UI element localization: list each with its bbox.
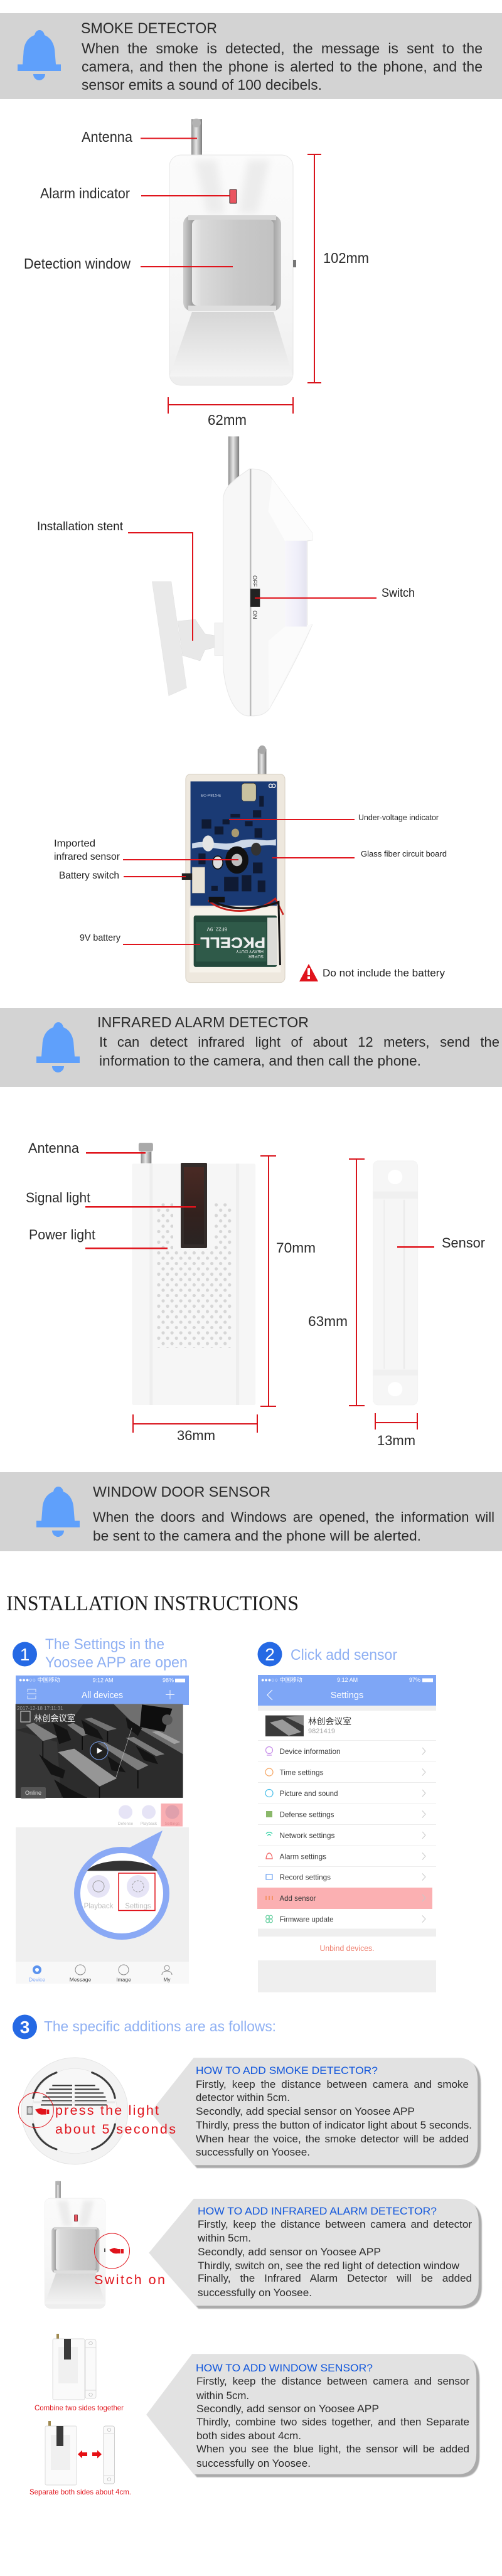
tab bar: Image: [116, 1977, 131, 1983]
callout text: When hear the voice, the smoke detector will be added: [196, 2133, 469, 2145]
panel: infrared alarm detector banner: [0, 1008, 502, 1087]
settings header: ●●●○○ 中国移动: [261, 1676, 302, 1683]
panel: infrared how-to callout: [149, 2199, 482, 2309]
action buttons: Settings: [165, 1822, 180, 1826]
settings list: Alarm settings: [280, 1852, 326, 1861]
callout text: detector within 5cm.: [196, 2092, 290, 2103]
app header: ●●●○○ 中国移动: [19, 1676, 60, 1683]
step 2 heading: [257, 1642, 397, 1667]
settings list: Picture and sound: [280, 1789, 338, 1798]
text block: window door description: [93, 1509, 494, 1544]
device summary row: 林创会议室: [308, 1716, 351, 1726]
heading: smoke detector: SMOKE DETECTOR: [81, 20, 217, 37]
devices combined: [53, 2334, 96, 2400]
step 1 heading: The Settings in the: [45, 1636, 164, 1653]
magnifier callout: [77, 1830, 166, 1937]
callout text: Thirdly, switch on, see the red light of detection window: [198, 2260, 460, 2272]
settings header: Settings: [331, 1691, 363, 1701]
tab bar: Message: [70, 1977, 92, 1983]
callout: alarm indicator: Alarm indicator: [40, 185, 130, 201]
device summary row: [265, 1716, 351, 1736]
battery print: SUPER: [248, 954, 264, 958]
callout heading: HOW TO ADD WINDOW SENSOR?: [196, 2362, 373, 2374]
magnifier callout: Playback: [84, 1903, 114, 1910]
callout text: [196, 2078, 472, 2158]
dimension: 102mm: [307, 154, 369, 383]
callout heading: HOW TO ADD INFRARED ALARM DETECTOR?: [198, 2205, 437, 2217]
tab bar: Device: [29, 1977, 45, 1983]
text block: infrared description: It can detect infrared light of about 12 meters, send the: [99, 1034, 499, 1050]
callout shape: [149, 2199, 482, 2309]
side button: [293, 260, 296, 267]
step 1 heading: [13, 1636, 188, 1671]
settings list: [258, 1741, 436, 1929]
callout text: Thirdly, press the button of indicator light about 5 seconds.: [196, 2119, 472, 2131]
icon: bell: [36, 1022, 80, 1072]
callout: 9V battery: 9V battery: [80, 933, 120, 943]
text block: smoke detector description: When the smoke is detected, the message is sent to the: [82, 40, 483, 56]
heading: window door sensor: WINDOW DOOR SENSOR: [93, 1483, 270, 1500]
battery print: PKCELL: [200, 934, 265, 951]
settings header: [258, 1675, 436, 1706]
instruction text: Switch on: [94, 2272, 165, 2287]
callout: sensor: [397, 1235, 485, 1251]
callout: imported infrared sensor: Imported: [54, 838, 95, 849]
camera photo: [16, 1704, 183, 1798]
caption: separate: Separate both sides about 4cm.: [29, 2488, 131, 2496]
callout text: Firstly, keep the distance between camera and detector: [198, 2218, 472, 2230]
action buttons: Playback: [141, 1822, 158, 1826]
callout: power light: Power light: [29, 1227, 95, 1243]
dimension: 70mm: [260, 1156, 316, 1406]
dimension: 102mm: 102mm: [323, 250, 369, 266]
marker: switch circle: [94, 2233, 129, 2269]
callout heading: HOW TO ADD SMOKE DETECTOR?: [196, 2065, 378, 2076]
callout: antenna: Antenna: [82, 129, 132, 145]
dimension: 62mm: [168, 397, 293, 428]
callout text: Secondly, add sensor on Yoosee APP: [198, 2246, 381, 2258]
highlight: add sensor: [257, 1888, 432, 1909]
text block: smoke detector description: camera, and then the phone is alerted to the phone, and the: [82, 58, 483, 75]
dimension: 36mm: 36mm: [177, 1428, 215, 1443]
device: side view: [152, 436, 312, 716]
dimension: 63mm: [308, 1159, 365, 1406]
callout: detection window: Detection window: [24, 255, 131, 272]
settings list: Firmware update: [280, 1915, 334, 1924]
panel: window sensor how-to callout: [146, 2354, 479, 2477]
dimension: 13mm: 13mm: [377, 1433, 415, 1448]
text block: window door description: be sent to the camera and the phone will be alerted.: [93, 1528, 421, 1544]
callout: installation stent: Installation stent: [37, 520, 124, 533]
callout: antenna: Antenna: [28, 1140, 80, 1156]
callout shape: [146, 2354, 479, 2477]
callout text: Firstly, keep the distance between camera and sensor: [196, 2375, 469, 2387]
callout text: Firstly, keep the distance between camera and smoke: [196, 2078, 469, 2090]
device: opened housing with circuit board and battery: EC-P815-E: [201, 793, 221, 798]
icon: bell: [18, 30, 61, 80]
text block: infrared description: [99, 1034, 499, 1069]
device: smoke detector: [18, 2058, 128, 2164]
callout text: within 5cm.: [196, 2390, 249, 2402]
panel: smoke detector how-to callout: [151, 2058, 481, 2168]
settings list: Defense settings: [280, 1810, 334, 1819]
callout: signal light: Signal light: [26, 1190, 90, 1205]
panel: side view with stent and switch: ON: [252, 611, 258, 619]
callout shape: [151, 2058, 481, 2168]
step 3 heading: [13, 2014, 276, 2039]
step 3 heading: 3: [20, 2018, 29, 2037]
panel: internal view: [54, 746, 447, 983]
step 3 heading: The specific additions are as follows:: [44, 2018, 276, 2034]
dimension: 62mm: 62mm: [208, 412, 247, 428]
instruction text: press the light: [55, 2103, 159, 2118]
unbind devices: Unbind devices.: [320, 1943, 374, 1953]
device: front view: [169, 119, 293, 385]
dimension: 36mm: [133, 1414, 257, 1443]
step 2 heading: 2: [265, 1645, 275, 1664]
text block: smoke detector description: [82, 40, 483, 93]
callout text: within 5cm.: [197, 2232, 251, 2244]
arrows: [78, 2450, 102, 2459]
warning: battery not included: Do not include the battery: [323, 967, 446, 979]
step 2 heading: Click add sensor: [291, 1647, 397, 1664]
panel: window door sensor banner: [0, 1472, 502, 1551]
camera photo: Online: [25, 1790, 41, 1796]
callout text: successfully on Yoosee.: [196, 2146, 310, 2158]
switch labels: OFF: [252, 575, 258, 587]
settings header: 97%: [409, 1677, 420, 1683]
device: opened housing with circuit board and battery: [182, 746, 285, 983]
panel: app screen settings: [257, 1675, 436, 1992]
heading: infrared alarm detector: INFRARED ALARM DETECTOR: [97, 1014, 309, 1030]
devices separated: [45, 2421, 114, 2485]
callout: battery switch: Battery switch: [59, 870, 119, 881]
icon: bell: [36, 1487, 80, 1537]
warning: battery not included: [299, 964, 446, 981]
panel: smoke detector how-to illustration: [18, 2058, 176, 2164]
panel: side view with stent and switch: [37, 436, 415, 716]
panel: app screen all devices: [16, 1675, 189, 1984]
callout: imported infrared sensor: [54, 838, 238, 862]
battery print: [200, 926, 265, 958]
settings list: Record settings: [280, 1873, 331, 1881]
device: infrared detector: [45, 2181, 105, 2308]
text block: smoke detector description: sensor emits a sound of 100 decibels.: [82, 77, 322, 93]
highlight: settings button: [161, 1804, 183, 1826]
magnifier callout: Settings: [125, 1903, 151, 1910]
tab bar: [16, 1962, 189, 1984]
device summary row: 9821419: [308, 1728, 335, 1735]
step 1 heading: 1: [20, 1645, 29, 1664]
callout: imported infrared sensor: infrared sensor: [54, 852, 120, 862]
app header: All devices: [82, 1691, 123, 1701]
panel: window sensor how-to illustration: [29, 2334, 131, 2496]
callout text: successfully on Yoosee.: [196, 2457, 311, 2469]
callout text: Thirdly, combine two sides together, and then Separate: [196, 2416, 469, 2428]
panel: window door sensor dimensions: [26, 1140, 485, 1448]
battery print: 6F22. 9V: [206, 926, 227, 932]
panel: infrared detector front view: [24, 119, 369, 428]
text block: window door description: When the doors and Windows are opened, the information will: [93, 1509, 494, 1525]
action buttons: Defense: [118, 1822, 133, 1826]
callout: under-voltage indicator: Under-voltage indicator: [358, 813, 439, 822]
panel: smoke detector how-to illustration: about 5 seconds: [55, 2122, 176, 2137]
app header: [16, 1675, 189, 1705]
settings header: 9:12 AM: [337, 1677, 358, 1683]
callout text: Finally, the Infrared Alarm Detector will be added: [198, 2272, 472, 2284]
device: siren unit: [132, 1143, 255, 1405]
heading: installation instructions: INSTALLATION INSTRUCTIONS: [6, 1592, 299, 1615]
battery print: HEAVY DUTY: [236, 949, 264, 953]
dimension: 63mm: 63mm: [308, 1313, 348, 1329]
callout text: [197, 2218, 472, 2299]
tab bar: My: [163, 1977, 171, 1983]
callout text: both sides about 4cm.: [196, 2430, 301, 2442]
callout: installation stent: [37, 520, 193, 641]
callout: glass fiber circuit board: Glass fiber circuit board: [361, 849, 447, 858]
settings list: Device information: [280, 1747, 340, 1756]
callout text: When you see the blue light, the sensor will be added: [196, 2443, 469, 2455]
action buttons: [118, 1805, 180, 1826]
step 1 heading: Yoosee APP are open: [45, 1654, 188, 1671]
dimension: 70mm: 70mm: [276, 1240, 316, 1256]
caption: combine: Combine two sides together: [35, 2403, 124, 2412]
panel: smoke detector banner: [0, 13, 502, 99]
camera photo: 林创会议室: [34, 1713, 75, 1723]
app header: 98%: [163, 1677, 174, 1683]
settings list: Add sensor: [280, 1894, 316, 1903]
callout text: Secondly, add sensor on Yoosee APP: [196, 2403, 379, 2415]
text block: infrared description: information to the camera, and then call the phone.: [99, 1053, 421, 1069]
callout text: successfully on Yoosee.: [198, 2287, 312, 2299]
camera photo: 2017-12-18 17:11:31: [17, 1706, 63, 1711]
app header: 9:12 AM: [92, 1677, 114, 1683]
callout text: Secondly, add special sensor on Yoosee APP: [196, 2105, 415, 2117]
settings list: Time settings: [280, 1768, 324, 1777]
zoomed grey area: [16, 1827, 189, 1962]
settings list: Network settings: [280, 1831, 335, 1840]
callout: sensor: Sensor: [442, 1235, 485, 1251]
device: magnetic sensor: [373, 1161, 418, 1405]
callout text: [196, 2375, 469, 2469]
callout: switch: Switch: [382, 587, 415, 600]
panel: infrared how-to illustration: [45, 2181, 165, 2308]
dimension: 13mm: [375, 1413, 417, 1448]
